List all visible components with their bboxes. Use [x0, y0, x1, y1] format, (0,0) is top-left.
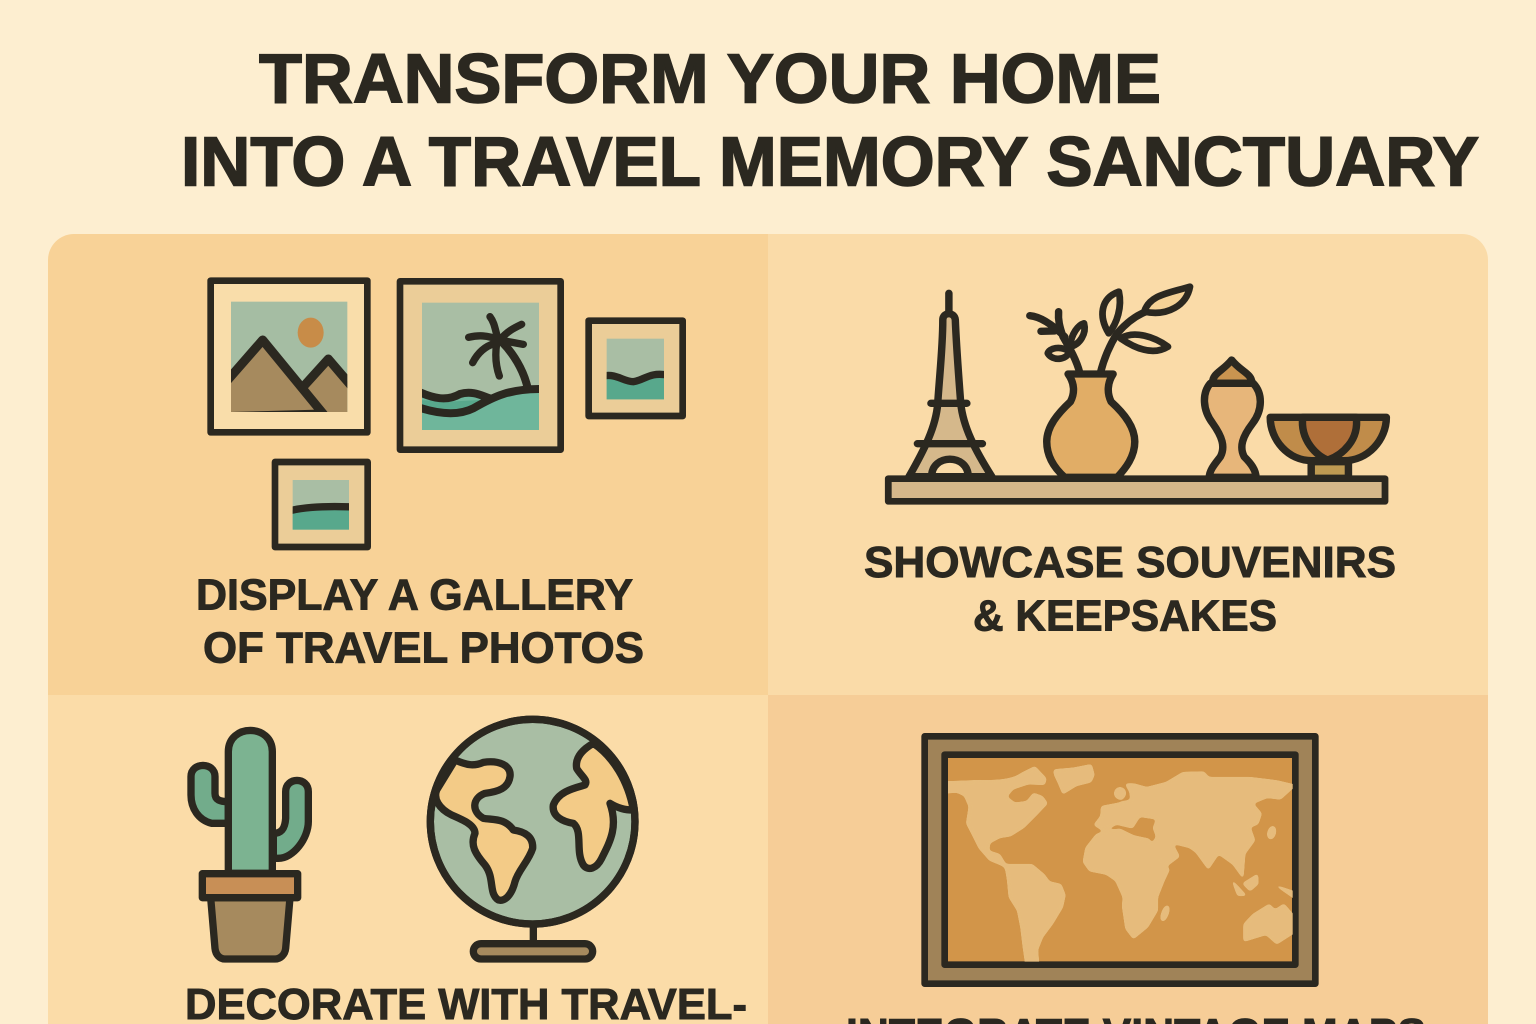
icon: globe on stand — [430, 719, 635, 959]
heading: showcase souvenirs: & KEEPSAKES — [973, 592, 1277, 640]
icon: potted cactus — [191, 730, 308, 959]
title: TRANSFORM YOUR HOME — [259, 40, 1161, 118]
icon: gallery of framed travel photos — [211, 281, 683, 547]
panel: showcase souvenirs and keepsakes — [768, 234, 1488, 695]
world map landmasses — [937, 764, 1298, 965]
framed photo: mountains and sun — [211, 281, 367, 432]
panel: decorate with travel-inspired items — [48, 695, 768, 1024]
souvenir: lidded jar — [1204, 360, 1260, 477]
panel: display a gallery of travel photos — [48, 234, 768, 695]
souvenir: bowl — [1270, 417, 1386, 478]
title — [181, 40, 1479, 200]
icon: framed vintage world map — [925, 736, 1315, 984]
heading: showcase souvenirs: SHOWCASE SOUVENIRS — [864, 538, 1396, 587]
shelf — [888, 479, 1385, 501]
icon: cactus and globe — [191, 719, 635, 959]
title: INTO A TRAVEL MEMORY SANCTUARY — [181, 122, 1479, 200]
heading: display a gallery: OF TRAVEL PHOTOS — [203, 624, 644, 672]
map frame — [925, 736, 1315, 984]
heading: display a gallery: DISPLAY A GALLERY — [196, 570, 633, 620]
framed photo: palm tree beach — [400, 281, 561, 450]
panel: integrate vintage maps — [768, 695, 1488, 1024]
heading: showcase souvenirs — [864, 546, 1395, 632]
framed photo: small waves — [589, 321, 683, 416]
heading: display a gallery — [198, 578, 643, 664]
framed photo: small horizon — [275, 462, 368, 547]
icon: shelf with souvenirs — [888, 287, 1386, 501]
souvenir: eiffel tower — [909, 293, 992, 477]
souvenir: vase with plant — [1030, 287, 1190, 477]
